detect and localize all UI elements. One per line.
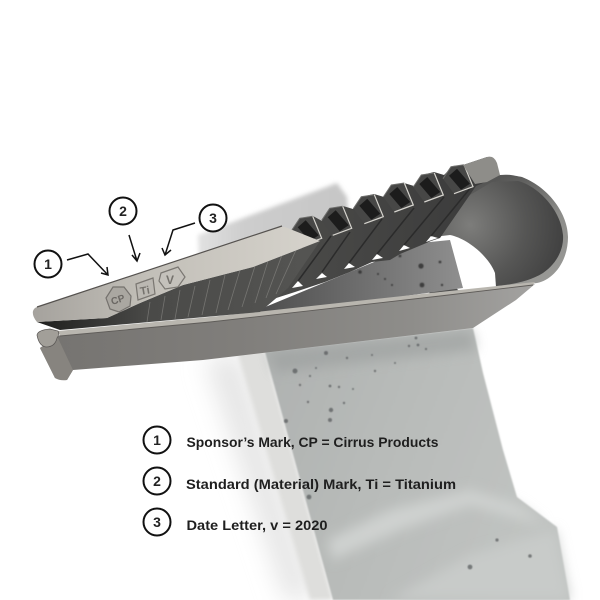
legend item 1: Sponsor’s Mark, CP = Cirrus Products xyxy=(186,434,439,450)
callout 2 xyxy=(110,198,140,261)
concrete pores xyxy=(284,337,532,569)
hallmark: date letter v xyxy=(159,267,185,289)
concrete seen through clip xyxy=(258,240,463,316)
hallmark: sponsor's mark CP: CP xyxy=(110,293,127,308)
callout 3: 3 xyxy=(209,210,217,226)
rib dividing lines xyxy=(298,186,472,281)
teeth xyxy=(292,165,473,245)
hallmark: sponsor's mark CP xyxy=(106,287,131,312)
hallmark: standard mark Ti: Ti xyxy=(139,284,151,298)
hallmark: date letter v: V xyxy=(166,273,174,287)
opening with white background xyxy=(420,235,496,292)
legend item 2: Standard (Material) Mark, Ti = Titanium xyxy=(186,476,456,492)
top face with hallmarks xyxy=(33,226,320,322)
callout 3 xyxy=(162,204,226,255)
plate flange xyxy=(40,336,73,380)
serrated ribs xyxy=(270,157,500,300)
hatched underside xyxy=(37,241,320,330)
legend item 3 xyxy=(144,508,328,536)
curl rim xyxy=(420,175,568,296)
white gaps between ribs xyxy=(292,236,438,288)
rib body xyxy=(270,157,497,300)
titanium clip: curved spring xyxy=(37,175,568,380)
hallmark: standard mark Ti xyxy=(136,278,155,300)
legend xyxy=(144,426,456,536)
legend item 2 xyxy=(144,468,456,494)
lower plate xyxy=(40,284,535,380)
plate rounded end xyxy=(37,329,59,347)
clip shoulder xyxy=(463,157,500,184)
legend item 1 xyxy=(144,426,439,454)
curl interior xyxy=(420,181,563,296)
legend item 2: 2 xyxy=(153,473,161,489)
callout 2: 2 xyxy=(119,203,127,219)
callout 1 xyxy=(34,250,108,278)
concrete stand xyxy=(198,183,570,600)
legend item 3: 3 xyxy=(153,514,161,530)
legend item 1: 1 xyxy=(153,432,161,448)
callout 1: 1 xyxy=(44,256,52,272)
legend item 3: Date Letter, v = 2020 xyxy=(186,517,328,533)
plate lip highlight xyxy=(58,282,535,336)
